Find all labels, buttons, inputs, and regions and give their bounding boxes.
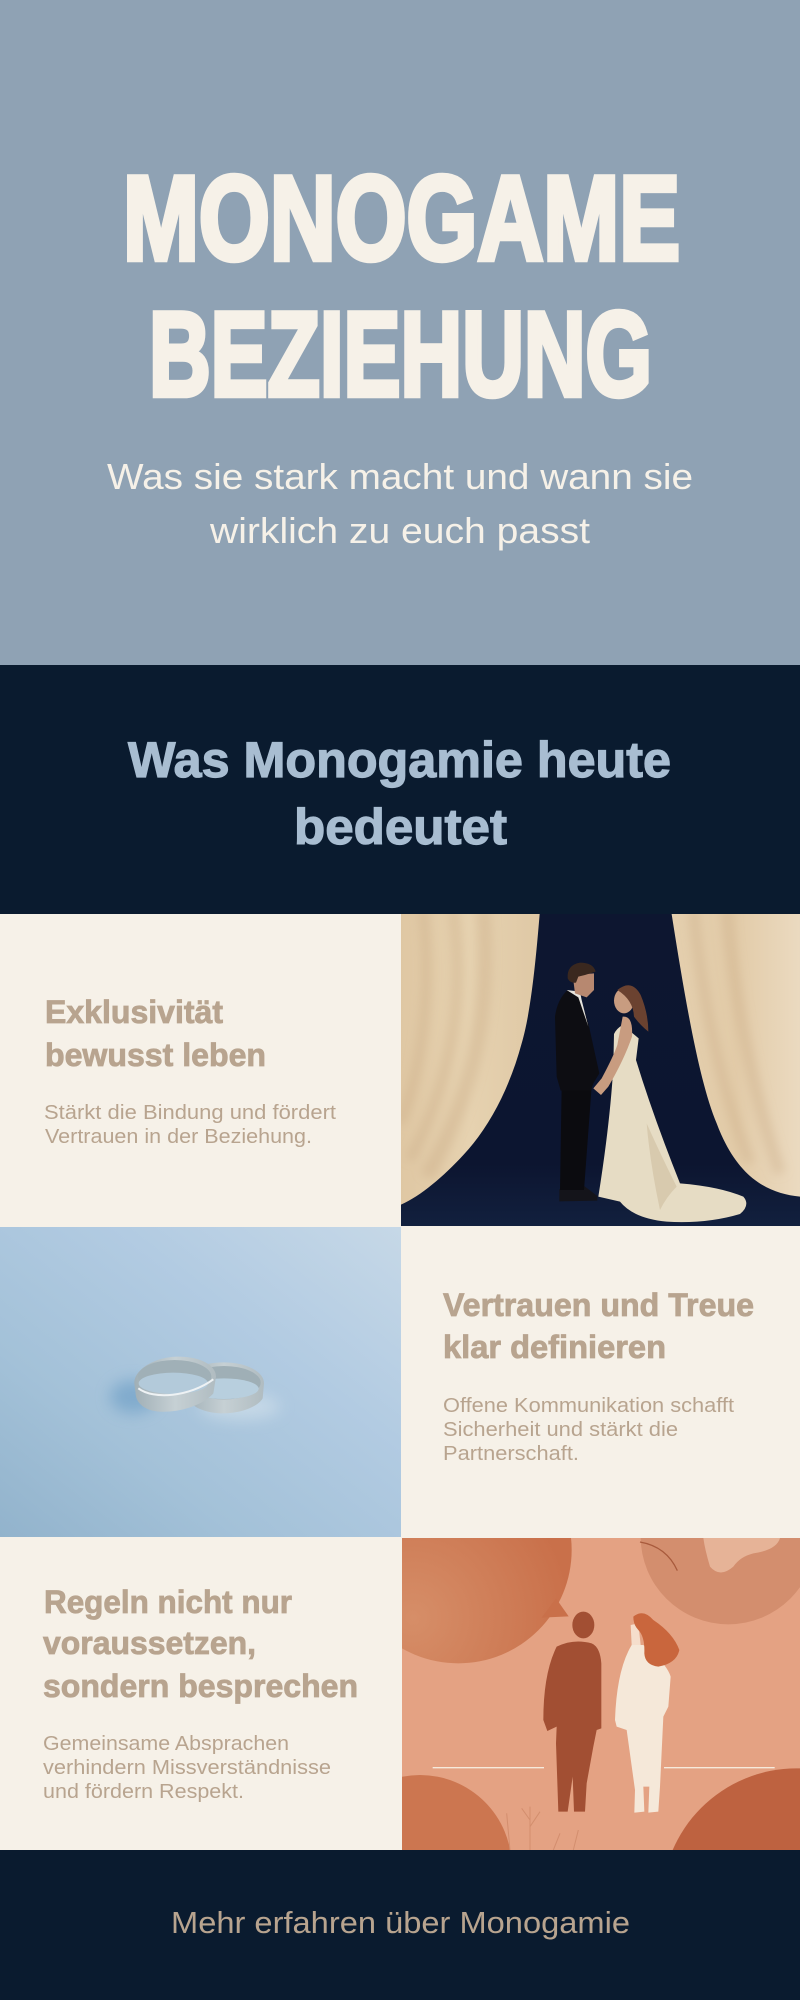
heading: Vertrauen und Treue klar definieren <box>443 1287 754 1365</box>
heading: Exklusivität bewusst leben: bewusst leben <box>45 1037 266 1073</box>
subtitle <box>107 456 693 551</box>
body text: verhindern Missverständnisse <box>43 1757 331 1779</box>
body text <box>44 1102 336 1148</box>
horizon line: left <box>432 1767 544 1768</box>
panel: section heading band <box>0 665 800 914</box>
image: couple between curtains <box>400 910 800 1226</box>
heading: Regeln nicht nur voraussetzen, sondern besprechen <box>43 1584 358 1704</box>
text block: Regeln besprechen <box>43 1584 358 1803</box>
panel: cream content background <box>0 914 800 1850</box>
right curtain <box>671 910 800 1197</box>
heading: Exklusivität bewusst leben: Exklusivität <box>45 994 223 1030</box>
image: illustrated couple with speech bubbles <box>402 1538 800 1850</box>
ring: left <box>134 1357 216 1412</box>
plants <box>507 1807 578 1850</box>
footer text: Mehr erfahren über Monogamie <box>171 1905 630 1940</box>
section heading: Was Monogamie heute <box>128 732 671 788</box>
title <box>123 152 680 422</box>
man in black suit <box>555 963 599 1201</box>
circle: bottom right <box>672 1768 800 1850</box>
woman in white dress <box>593 985 746 1222</box>
text block: Vertrauen und Treue <box>443 1287 754 1465</box>
heading: Exklusivität bewusst leben <box>45 994 266 1073</box>
circle: bottom left <box>402 1775 510 1850</box>
subtitle: wirklich zu euch passt <box>209 510 590 551</box>
horizon line: right <box>664 1767 775 1768</box>
section heading <box>128 732 671 855</box>
ring: right <box>194 1362 264 1414</box>
body text: Vertrauen in der Beziehung. <box>45 1126 312 1148</box>
highlight beside rings <box>200 1393 280 1420</box>
panel: hero header <box>0 0 800 665</box>
subtitle: Was sie stark macht und wann sie <box>107 456 693 497</box>
body text: Offene Kommunikation schafft <box>443 1395 734 1417</box>
heading: Vertrauen und Treue klar definieren: Vertrauen und Treue <box>443 1287 754 1323</box>
speech bubble: right <box>640 1538 800 1624</box>
heading: Regeln nicht nur voraussetzen, sondern besprechen: voraussetzen, <box>43 1625 256 1661</box>
heading: Regeln nicht nur voraussetzen, sondern besprechen: Regeln nicht nur <box>44 1584 292 1620</box>
body text: Sicherheit und stärkt die <box>443 1419 678 1441</box>
section heading: bedeutet <box>294 799 507 855</box>
left curtain <box>400 910 540 1205</box>
body text <box>443 1395 734 1465</box>
body text: Partnerschaft. <box>443 1443 579 1465</box>
text block: Exklusivität <box>44 994 336 1148</box>
heading: Vertrauen und Treue klar definieren: klar definieren <box>443 1329 666 1365</box>
shadow under rings <box>110 1380 157 1413</box>
body text: und fördern Respekt. <box>43 1781 244 1803</box>
image: wedding rings on blue surface <box>0 1227 401 1537</box>
body text <box>43 1733 331 1803</box>
body text: Gemeinsame Absprachen <box>43 1733 289 1755</box>
panel: footer <box>0 1850 800 2000</box>
woman figure <box>615 1613 679 1813</box>
speech bubble: left <box>402 1538 572 1664</box>
body text: Stärkt die Bindung und fördert <box>44 1102 336 1124</box>
man figure <box>543 1612 601 1812</box>
heading: Regeln nicht nur voraussetzen, sondern besprechen: sondern besprechen <box>43 1668 358 1704</box>
